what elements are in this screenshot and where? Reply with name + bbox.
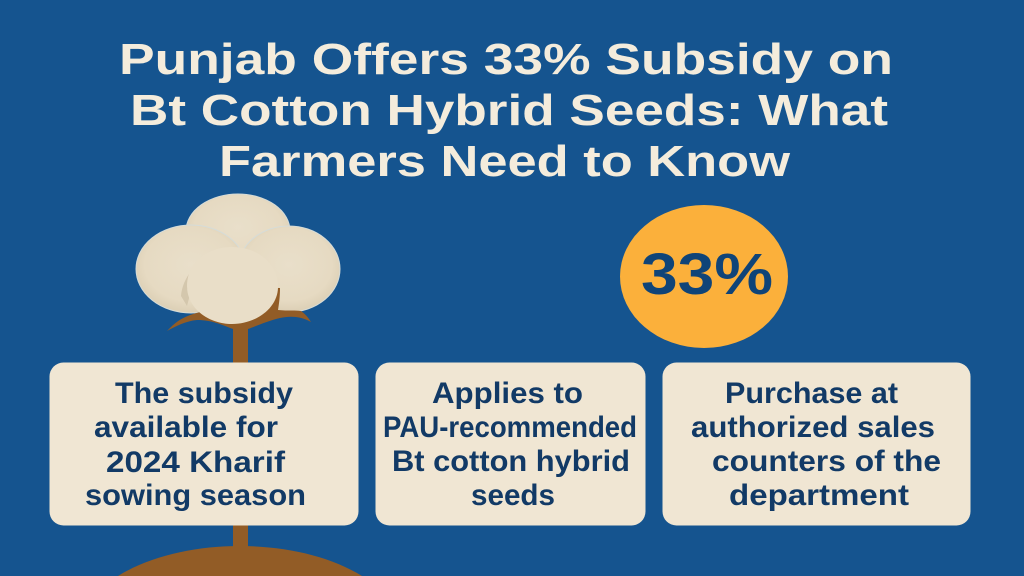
plant branches [167,286,311,331]
card: PAU-recommended seeds: seeds [471,479,555,512]
card: purchase location: Purchase at [725,377,898,410]
title: Punjab Offers 33% Subsidy on [119,35,893,84]
card: PAU-recommended seeds [376,362,646,526]
card: PAU-recommended seeds: Applies to [432,377,583,410]
card: PAU-recommended seeds: PAU-recommended [383,411,637,444]
badge: 33%: 33% [641,242,773,307]
title: Farmers Need to Know [219,137,791,186]
plant stem [233,320,248,547]
title: Bt Cotton Hybrid Seeds: What [130,86,888,135]
card: kharif season: sowing season [85,479,306,512]
cotton boll: right [238,226,340,312]
title [119,35,893,186]
card: purchase location: authorized sales [691,411,935,444]
card: purchase location: department [729,479,909,512]
card: PAU-recommended seeds: Bt cotton hybrid [392,445,630,478]
boll shadow [181,248,232,306]
card: kharif season: The subsidy [115,377,293,410]
icon: cotton plant [136,194,340,547]
card: kharif season: 2024 Kharif [106,446,286,479]
icon: soil mound [118,546,362,576]
cotton boll: left [136,225,246,313]
badge: 33% [620,205,788,348]
card: purchase location: counters of the [712,445,941,478]
card: kharif season: available for [94,411,278,444]
cotton boll: top [186,194,290,268]
card: kharif season [50,362,358,526]
card: purchase location [662,362,970,526]
cotton boll: centre [187,247,278,324]
